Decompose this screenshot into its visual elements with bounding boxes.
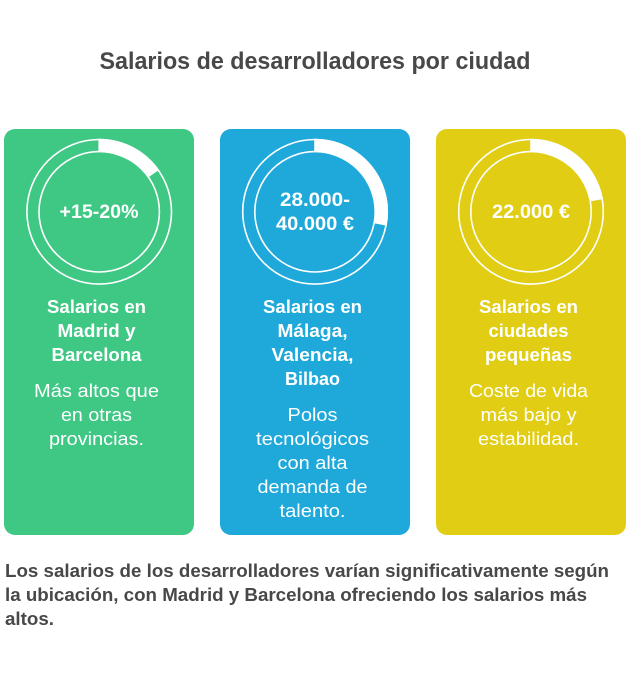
heading: Salarios en ciudades pequeñas — [479, 297, 578, 365]
title: Salarios de desarrolladores por ciudad — [100, 48, 530, 75]
heading: Salarios en Málaga, Valencia, Bilbao: Salarios en — [263, 297, 362, 317]
description: Málaga, Valencia, Bilbao: con alta — [278, 453, 349, 473]
heading: Salarios en ciudades pequeñas: Salarios en — [479, 297, 578, 317]
panel: Málaga, Valencia, Bilbao — [220, 129, 410, 535]
ring chart: +15-20%: +15-20% — [59, 202, 139, 223]
heading: Salarios en Madrid y Barcelona: Barcelona — [52, 345, 143, 365]
description: Madrid y Barcelona: provincias. — [49, 429, 144, 449]
description: Málaga, Valencia, Bilbao: Polos — [288, 405, 338, 425]
ring chart: 28.000-40.000 €: 40.000 € — [276, 214, 354, 235]
heading: Salarios en Madrid y Barcelona: Salarios en — [47, 297, 146, 317]
heading: Salarios en Málaga, Valencia, Bilbao: Valencia, — [272, 345, 354, 365]
description: Málaga, Valencia, Bilbao: tecnológicos — [256, 429, 369, 449]
summary text — [5, 561, 609, 629]
panel: Madrid y Barcelona — [4, 129, 194, 535]
heading: Salarios en ciudades pequeñas: pequeñas — [485, 345, 572, 365]
card background: yellow — [436, 129, 626, 535]
description: ciudades pequeñas: estabilidad. — [478, 429, 579, 449]
ring chart: 28.000-40.000 €: 28.000- — [280, 190, 350, 211]
heading: Salarios en ciudades pequeñas: ciudades — [488, 321, 568, 341]
description: Málaga, Valencia, Bilbao — [256, 405, 369, 521]
description: ciudades pequeñas — [469, 381, 589, 449]
heading: Salarios en Madrid y Barcelona: Madrid y — [58, 321, 136, 341]
description: ciudades pequeñas: más bajo y — [480, 405, 576, 425]
card background: green — [4, 129, 194, 535]
heading: Salarios en Málaga, Valencia, Bilbao: Málaga, — [278, 321, 348, 341]
description: Madrid y Barcelona — [34, 381, 159, 449]
ring chart: 22.000 € — [459, 139, 603, 284]
panel: ciudades pequeñas — [436, 129, 626, 535]
heading: Salarios en Málaga, Valencia, Bilbao — [263, 297, 362, 389]
heading: Salarios en Málaga, Valencia, Bilbao: Bilbao — [285, 369, 340, 389]
ring chart: 22.000 €: 22.000 € — [492, 202, 570, 223]
summary text: la ubicación, con Madrid y Barcelona ofreciendo los salarios más — [5, 585, 587, 605]
ring chart: +15-20% — [27, 139, 172, 284]
summary text: altos. — [5, 609, 54, 629]
description: Málaga, Valencia, Bilbao: talento. — [280, 501, 346, 521]
ring chart: 28.000-40.000 € — [243, 139, 388, 284]
description: Málaga, Valencia, Bilbao: demanda de — [258, 477, 368, 497]
description: Madrid y Barcelona: en otras — [61, 405, 132, 425]
summary text: Los salarios de los desarrolladores varían significativamente según — [5, 561, 609, 581]
heading: Salarios en Madrid y Barcelona — [47, 297, 146, 365]
card background: blue — [220, 129, 410, 535]
description: Madrid y Barcelona: Más altos que — [34, 381, 159, 401]
description: ciudades pequeñas: Coste de vida — [469, 381, 589, 401]
